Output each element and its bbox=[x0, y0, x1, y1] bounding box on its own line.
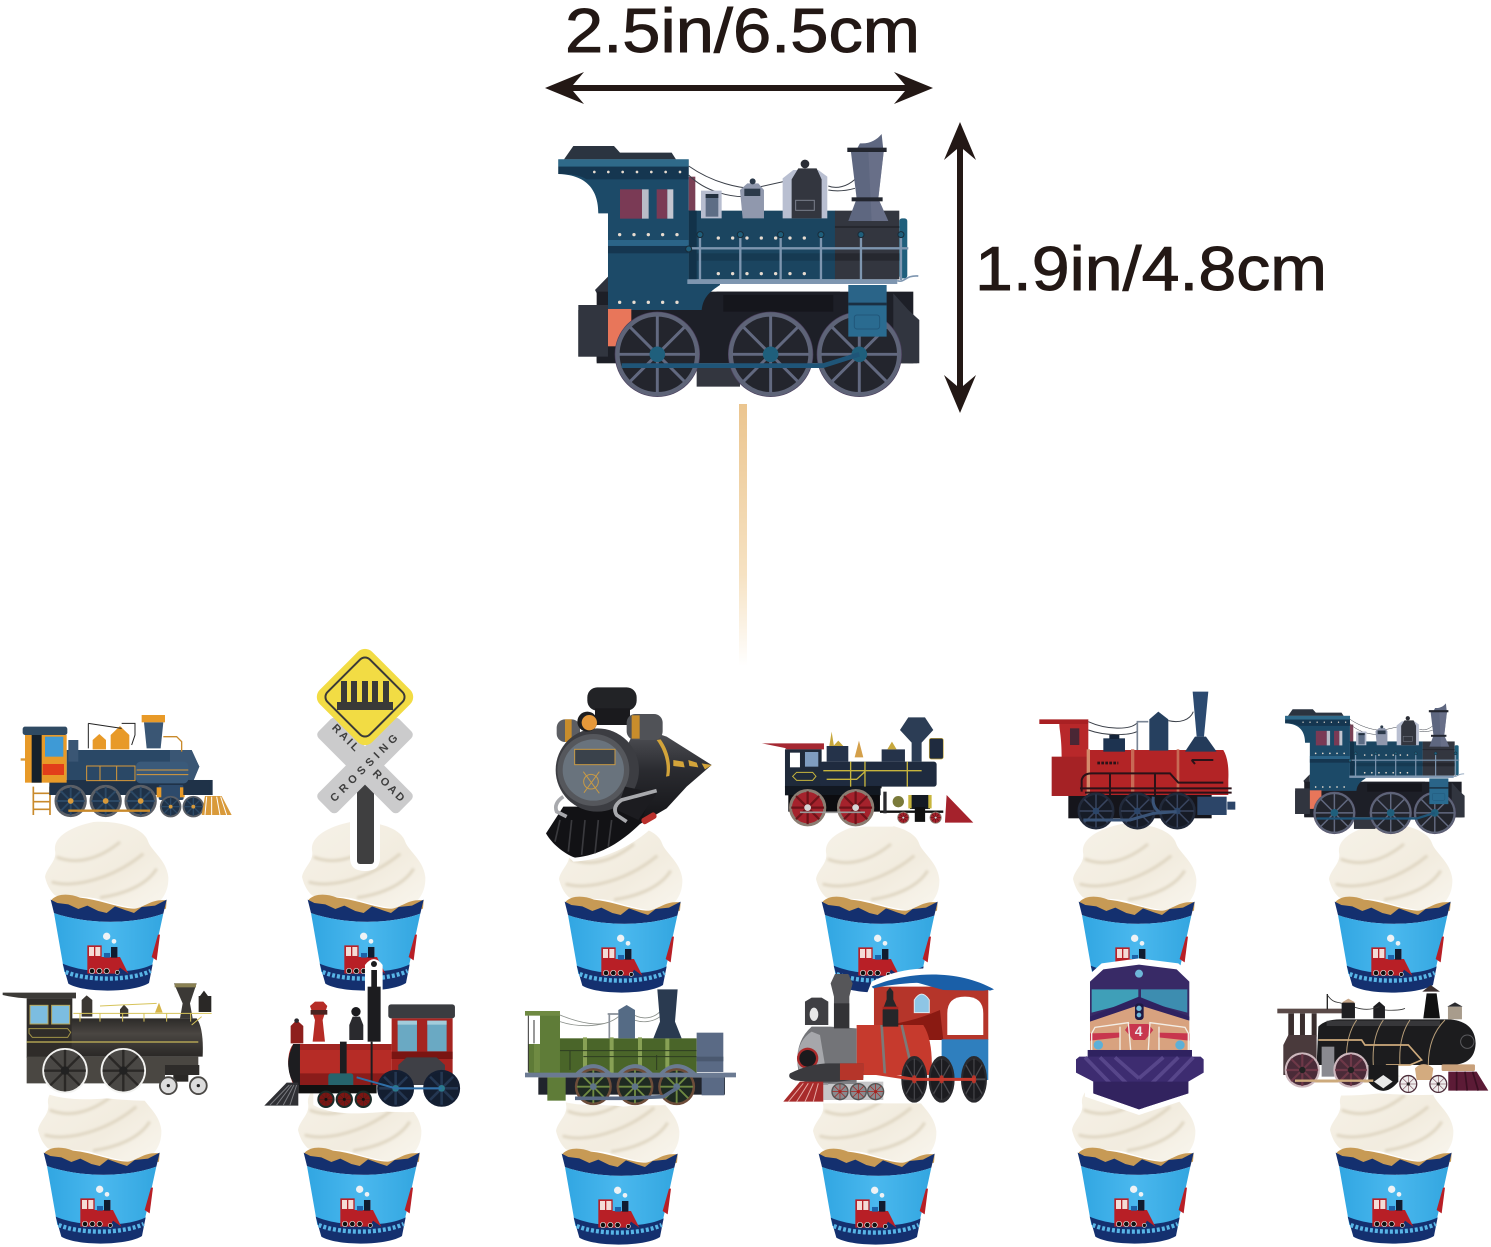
topper: railroad crossing sign: RAIL bbox=[329, 722, 363, 756]
topper: black locomotive with gold trim bbox=[1277, 985, 1488, 1096]
topper: red locomotive with passenger cab bbox=[264, 959, 467, 1113]
cupcake row 2, column 2 bbox=[298, 1075, 421, 1244]
topper: purple diesel locomotive, number 4 bbox=[1070, 958, 1208, 1115]
topper: black and yellow locomotive bbox=[3, 983, 212, 1101]
topper: blue and orange locomotive bbox=[21, 715, 232, 816]
crossbuck bbox=[315, 716, 415, 815]
cupcake row 2, column 1 bbox=[38, 1075, 161, 1244]
main train topper bbox=[558, 134, 919, 397]
topper: railroad crossing sign: CROSSING bbox=[328, 729, 404, 805]
topper: railroad crossing sign bbox=[313, 645, 417, 871]
cupcake row 1, column 3 bbox=[559, 824, 682, 993]
cupcake row 2, column 6 bbox=[1330, 1075, 1453, 1244]
cupcake row 2, column 4 bbox=[813, 1076, 936, 1245]
dimension label: height: 1.9in/4.8cm bbox=[975, 235, 1327, 304]
cupcake row 1, column 2 bbox=[302, 822, 425, 991]
arrow: width bbox=[545, 72, 933, 104]
cupcake row 2, column 3 bbox=[556, 1076, 679, 1245]
topper: green locomotive bbox=[525, 989, 736, 1107]
yellow warning sign bbox=[313, 645, 417, 749]
cupcake row 1, column 5 bbox=[1073, 824, 1196, 993]
topper: navy and gold locomotive with red wheels bbox=[762, 717, 973, 828]
topper: front view black locomotive bbox=[543, 687, 712, 862]
post bbox=[350, 800, 380, 871]
cupcake row 1, column 1 bbox=[45, 822, 168, 991]
topper: red locomotive bbox=[1039, 692, 1235, 828]
cupcake row 1, column 6 bbox=[1329, 824, 1452, 993]
topper: red and blue train with coach bbox=[783, 968, 1000, 1103]
topper: railroad crossing sign: ROAD bbox=[370, 768, 408, 806]
topper: small blue locomotive bbox=[1285, 703, 1465, 834]
cupcake row 1, column 4 bbox=[816, 824, 939, 993]
arrow: height bbox=[944, 122, 976, 413]
number 4: 4 bbox=[1135, 1023, 1143, 1039]
cupcake row 2, column 5 bbox=[1072, 1075, 1195, 1244]
toothpick bbox=[739, 404, 747, 666]
